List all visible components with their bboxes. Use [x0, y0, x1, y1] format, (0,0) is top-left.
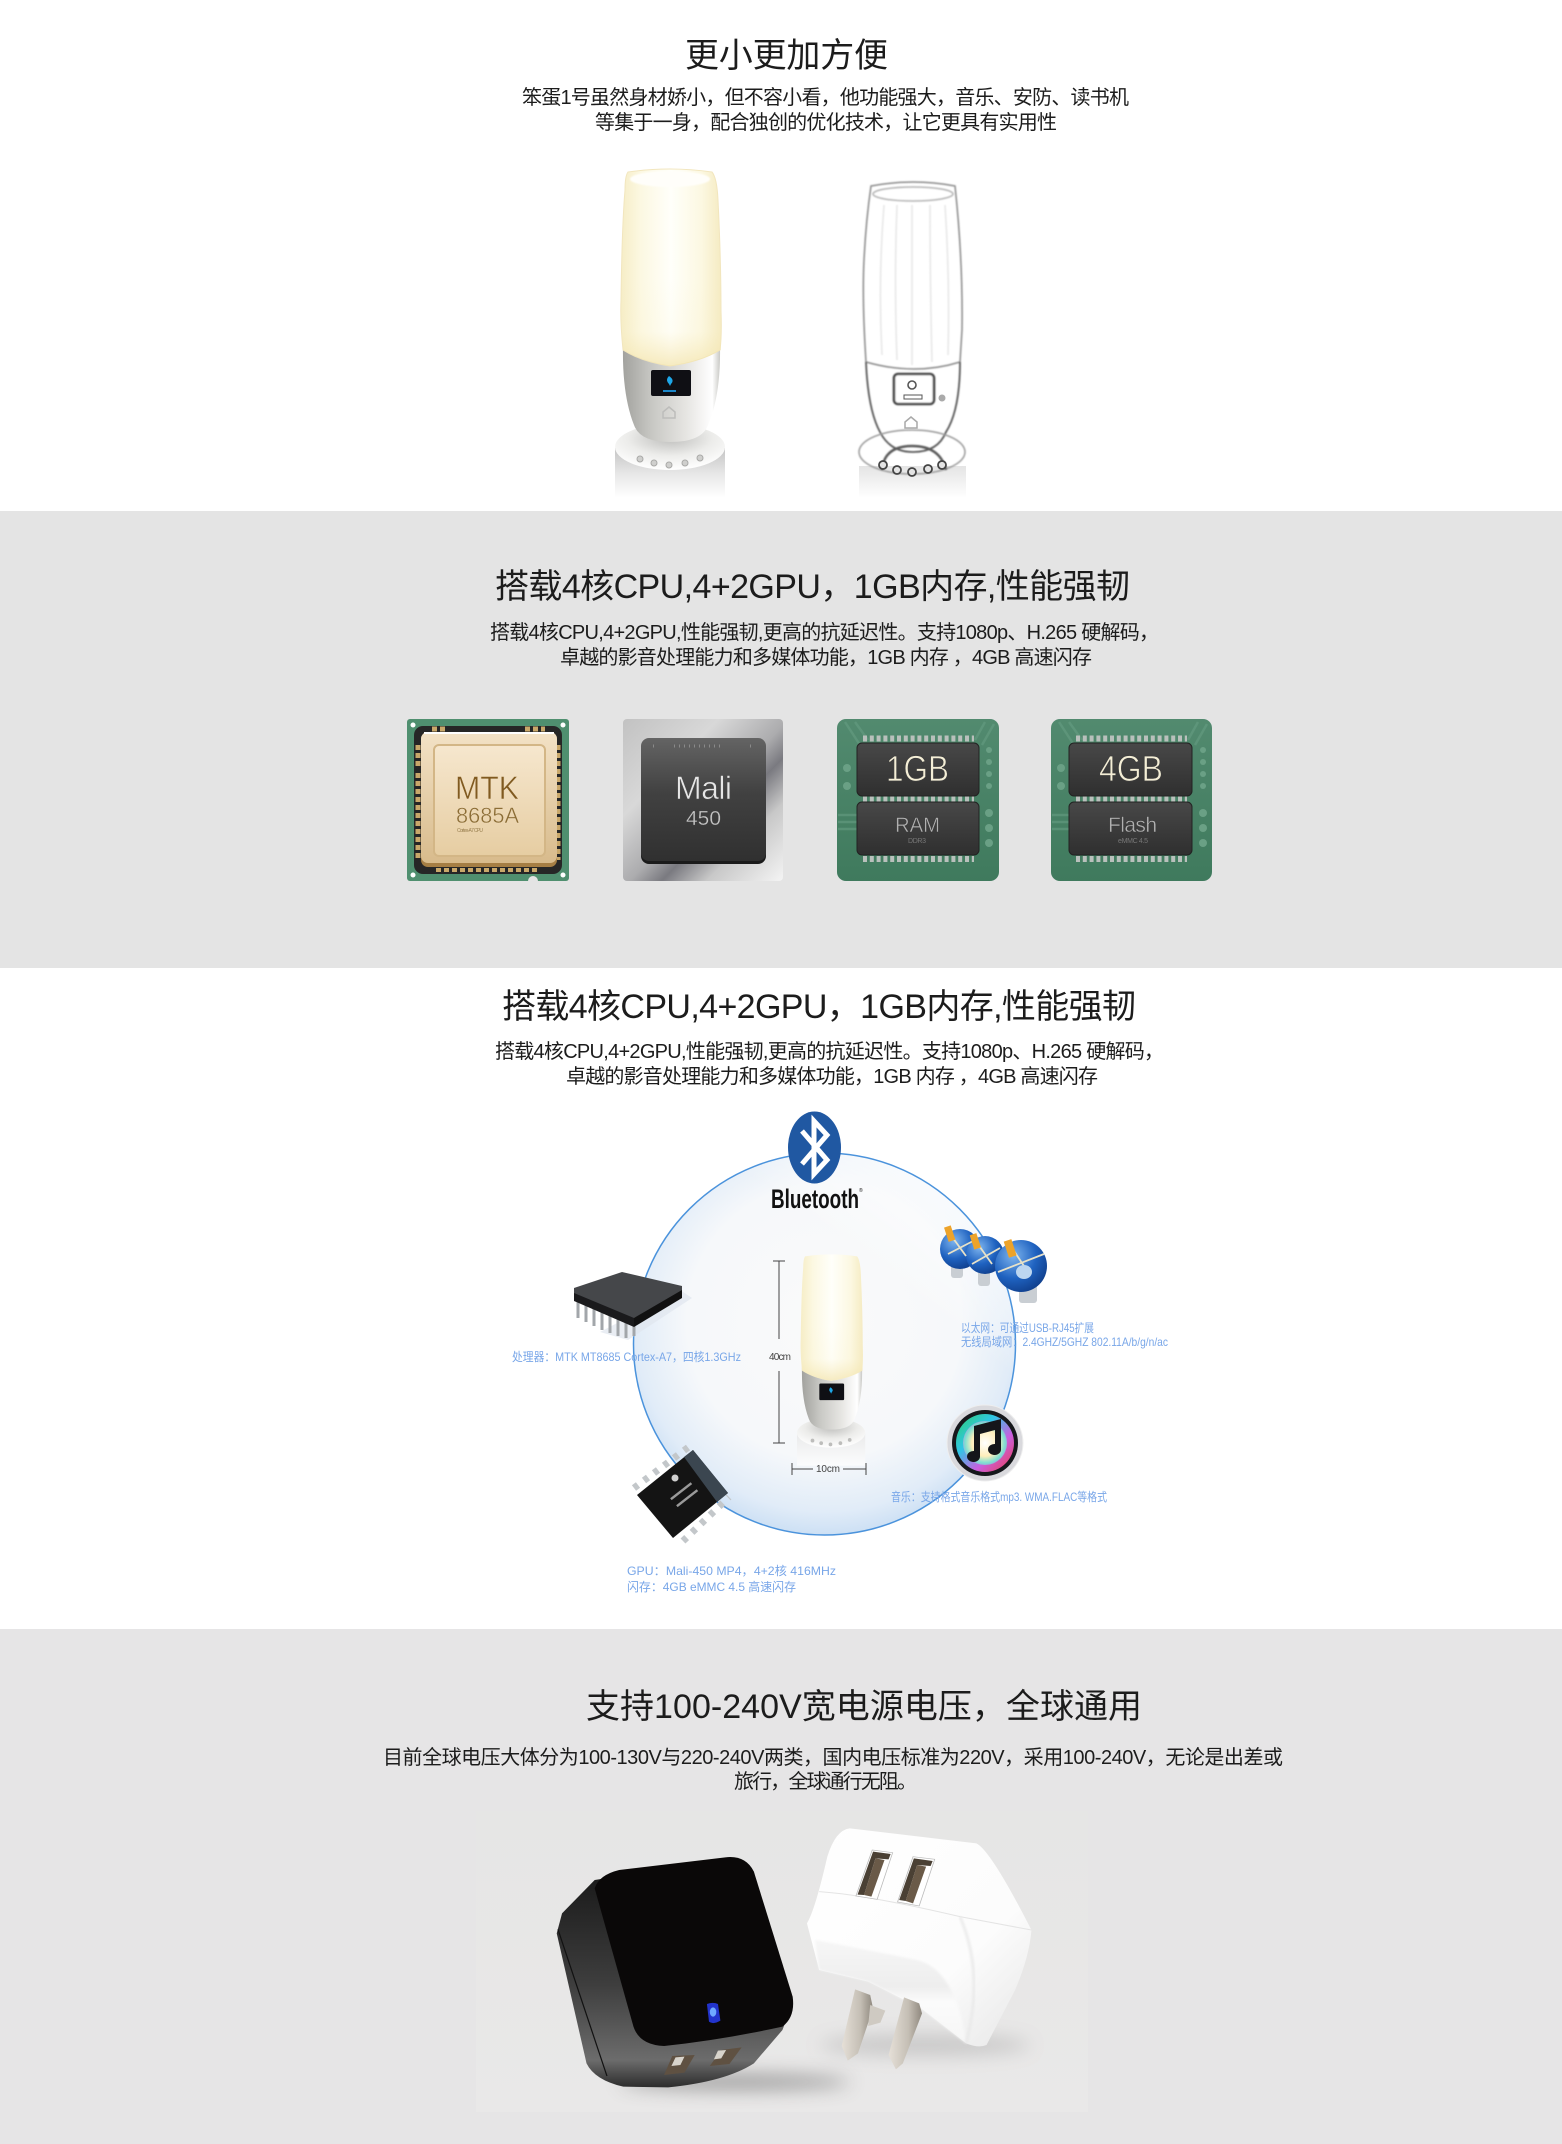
label: GPU and flash: 闪存：4GB eMMC 4.5 高速闪存 — [627, 1579, 796, 1594]
icon: 1GB RAM chip: DDR3 — [908, 838, 926, 845]
label: music: 音乐：支持格式音乐格式mp3. WMA.FLAC等格式 — [891, 1489, 1107, 1504]
label: network: 无线局域网：2.4GHZ/5GHZ 802.11A/b/g/n/ac — [961, 1335, 1168, 1349]
icon: MTK CPU chip: Cortex-A7 CPU — [457, 828, 483, 834]
label: GPU and flash — [627, 1564, 836, 1594]
icon: 1GB RAM chip — [837, 719, 999, 881]
icon: 4GB flash chip — [1051, 719, 1212, 881]
icon: Bluetooth logo — [771, 1112, 863, 1214]
icon: 1GB RAM chip: 1GB — [886, 748, 949, 789]
text block: section 1 description: 等集于一身，配合独创的优化技术，让它更具有实用性 — [595, 111, 1057, 134]
icon: 4GB flash chip: Flash — [1108, 814, 1157, 837]
label: processor: 处理器：MTK MT8685 Cortex-A7，四核1.3GHz — [512, 1350, 741, 1364]
lamp: lit product photo — [615, 169, 725, 498]
text block: section 3 description: 卓越的影音处理能力和多媒体功能，1GB 内存 ，4GB 高速闪存 — [566, 1065, 1098, 1088]
icon: GPU flash chip — [634, 1446, 729, 1541]
lamp: product with dimensions — [769, 1254, 866, 1475]
label: network — [961, 1320, 1168, 1349]
panel: CPU and memory — [0, 511, 1562, 968]
text block: section 3 description — [495, 1040, 1164, 1088]
icon: music note — [947, 1405, 1023, 1481]
panel: connectivity diagram — [0, 968, 1562, 1629]
icon: MTK CPU chip — [407, 719, 569, 886]
icon: 4GB flash chip: 4GB — [1099, 748, 1163, 789]
icon: processor chip — [574, 1272, 692, 1340]
heading: section 1: 更小更加方便 — [685, 37, 888, 75]
label: network: 以太网：可通过USB-RJ45扩展 — [961, 1320, 1094, 1335]
text block: section 1 description — [522, 86, 1129, 134]
icon: Bluetooth logo: Bluetooth — [771, 1184, 859, 1214]
icon: Bluetooth logo: ® — [859, 1187, 863, 1194]
text block: section 2 description: 搭载4核CPU,4+2GPU,性能强韧,更高的抗延迟性。支持1080p、H.265 硬解码， — [490, 621, 1159, 644]
text block: section 4 description — [383, 1746, 1283, 1793]
icon: Mali GPU chip: Mali — [675, 770, 732, 806]
text block: section 4 description: 旅行，全球通行无阻。 — [734, 1770, 917, 1793]
heading: section 3: 搭载4核CPU,4+2GPU，1GB内存,性能强韧 — [502, 988, 1136, 1026]
text block: section 2 description — [490, 621, 1159, 669]
icon: Mali GPU chip: 450 — [686, 808, 721, 830]
icon: Mali GPU chip — [623, 719, 783, 881]
icon: wireless network umbrellas — [940, 1225, 1047, 1303]
white adapter — [807, 1828, 1031, 2069]
icon: 1GB RAM chip: RAM — [895, 814, 940, 837]
black adapter — [557, 1857, 793, 2087]
icon: MTK CPU chip: 8685A — [456, 803, 519, 828]
text block: section 4 description: 目前全球电压大体分为100-130V与220-240V两类，国内电压标准为220V，采用100-240V，无论是出差或 — [383, 1746, 1283, 1769]
panel: wide voltage — [0, 1629, 1562, 2144]
text block: section 2 description: 卓越的影音处理能力和多媒体功能，1GB 内存 ，4GB 高速闪存 — [560, 646, 1092, 669]
lamp: product with dimensions: 10cm — [816, 1464, 840, 1475]
lamp: product with dimensions: 40cm — [769, 1352, 791, 1363]
heading: section 2: 搭载4核CPU,4+2GPU，1GB内存,性能强韧 — [495, 568, 1130, 606]
chart: feature circle — [634, 1153, 1016, 1535]
lamp: line sketch drawing — [859, 182, 966, 498]
icon: MTK CPU chip: MTK — [455, 770, 519, 806]
text block: section 3 description: 搭载4核CPU,4+2GPU,性能强韧,更高的抗延迟性。支持1080p、H.265 硬解码， — [495, 1040, 1164, 1063]
heading: section 4: 支持100-240V宽电源电压，全球通用 — [586, 1688, 1142, 1726]
panel: more compact and convenient — [0, 0, 1562, 511]
label: GPU and flash: GPU：Mali-450 MP4，4+2核 416MHz — [627, 1564, 836, 1578]
photo: USB power adapters — [476, 1811, 1088, 2112]
icon: 4GB flash chip: eMMC 4.5 — [1118, 838, 1148, 845]
text block: section 1 description: 笨蛋1号虽然身材娇小，但不容小看，他功能强大，音乐、安防、读书机 — [522, 86, 1129, 109]
